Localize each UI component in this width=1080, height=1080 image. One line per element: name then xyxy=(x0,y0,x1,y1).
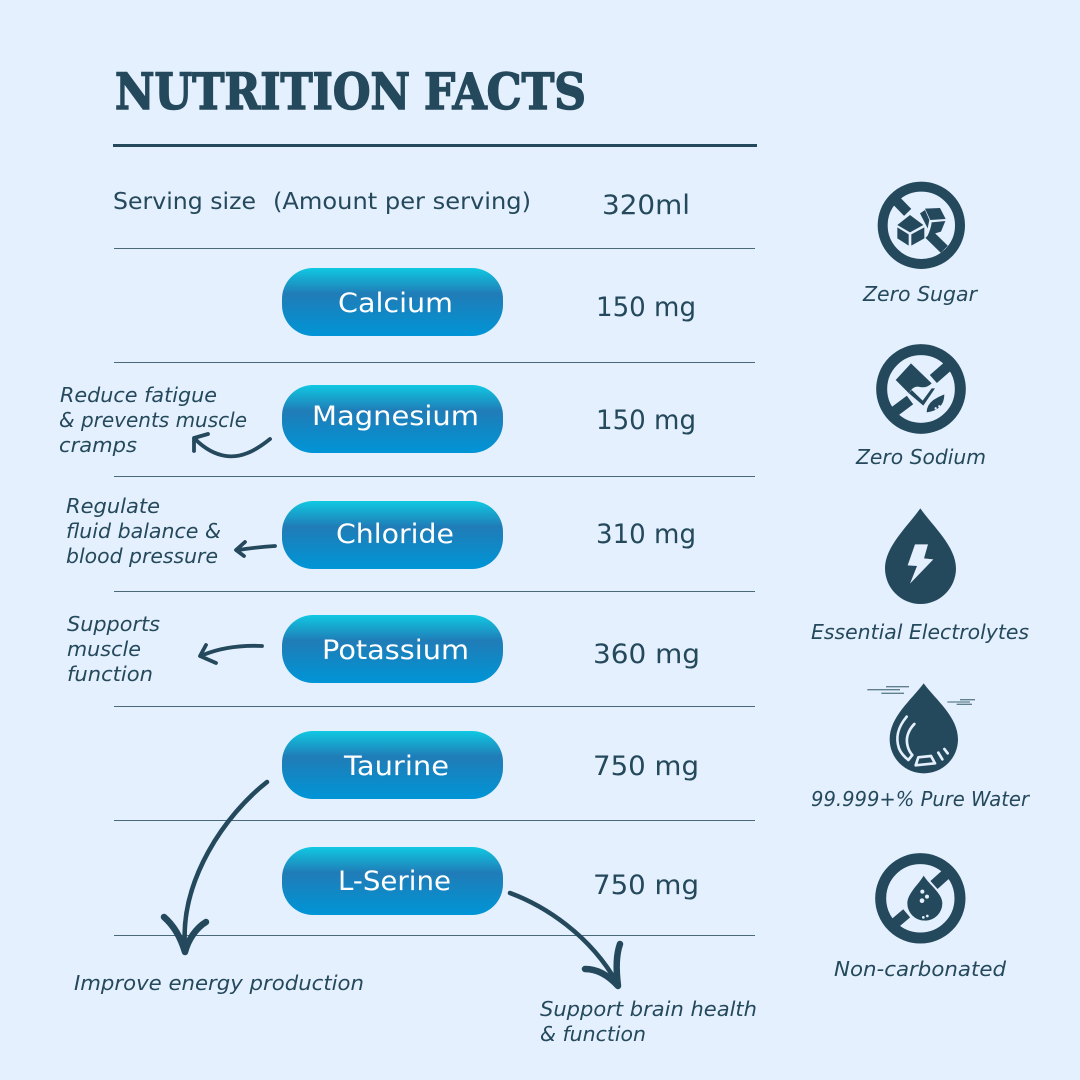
row: magnesium: Magnesium xyxy=(312,401,479,432)
row: chloride xyxy=(282,501,696,569)
title: FACTS xyxy=(424,62,586,121)
icon: zero sugar xyxy=(883,187,960,264)
note: magnesium benefit: & prevents muscle xyxy=(59,408,247,432)
note: chloride benefit: blood pressure xyxy=(66,544,218,568)
arrow: taurine xyxy=(164,782,267,952)
serving size row: 320ml xyxy=(602,190,690,221)
note: l-serine benefit xyxy=(540,997,757,1046)
row: calcium: Calcium xyxy=(338,288,453,319)
note: l-serine benefit: & function xyxy=(540,1022,646,1046)
note: potassium benefit: function xyxy=(67,662,153,686)
row: chloride: 310 mg xyxy=(596,519,696,550)
row: magnesium: 150 mg xyxy=(596,405,696,436)
label: zero sodium: Zero Sodium xyxy=(855,445,986,469)
row: calcium xyxy=(282,268,696,336)
serving size row: Serving size xyxy=(113,189,256,215)
note: magnesium benefit xyxy=(59,383,247,457)
row: potassium xyxy=(282,615,700,683)
label: zero sugar: Zero Sugar xyxy=(862,282,979,306)
icon: electrolyte drop xyxy=(885,508,956,604)
note: l-serine benefit: Support brain health xyxy=(540,997,757,1021)
row: taurine: Taurine xyxy=(343,751,449,782)
note: magnesium benefit: Reduce fatigue xyxy=(60,383,217,407)
row: potassium: 360 mg xyxy=(593,639,700,670)
arrow: chloride xyxy=(236,542,275,556)
note: chloride benefit: fluid balance & xyxy=(66,519,221,543)
note: taurine benefit: Improve energy production xyxy=(74,971,364,995)
row: l-serine: L-Serine xyxy=(338,866,451,897)
row: taurine: 750 mg xyxy=(593,751,699,782)
row: calcium: 150 mg xyxy=(596,292,696,323)
note: potassium benefit: Supports xyxy=(67,612,160,636)
row: chloride: Chloride xyxy=(336,519,454,550)
row: l-serine: 750 mg xyxy=(593,870,699,901)
label: non-carbonated: Non-carbonated xyxy=(834,957,1006,981)
note: chloride benefit xyxy=(66,494,221,568)
arrow: potassium xyxy=(200,645,262,663)
serving size row: (Amount per serving) xyxy=(273,189,531,215)
serving size row xyxy=(113,189,690,221)
row: taurine xyxy=(282,731,699,799)
note: magnesium benefit: cramps xyxy=(59,433,137,457)
note: chloride benefit: Regulate xyxy=(66,494,160,518)
note: potassium benefit xyxy=(67,612,160,686)
icon: non-carbonated xyxy=(881,859,960,938)
arrow: magnesium xyxy=(194,434,270,456)
row: magnesium xyxy=(282,385,696,453)
row: l-serine xyxy=(282,847,699,915)
row: potassium: Potassium xyxy=(322,635,469,666)
icon: zero sodium xyxy=(882,350,960,428)
label: essential electrolytes: Essential Electrolytes xyxy=(811,620,1029,644)
icon: pure water drop xyxy=(867,683,975,773)
title: NUTRITION xyxy=(115,62,410,121)
label: pure water: 99.999+% Pure Water xyxy=(811,787,1031,811)
arrow: l-serine xyxy=(510,893,620,986)
note: potassium benefit: muscle xyxy=(67,637,141,661)
